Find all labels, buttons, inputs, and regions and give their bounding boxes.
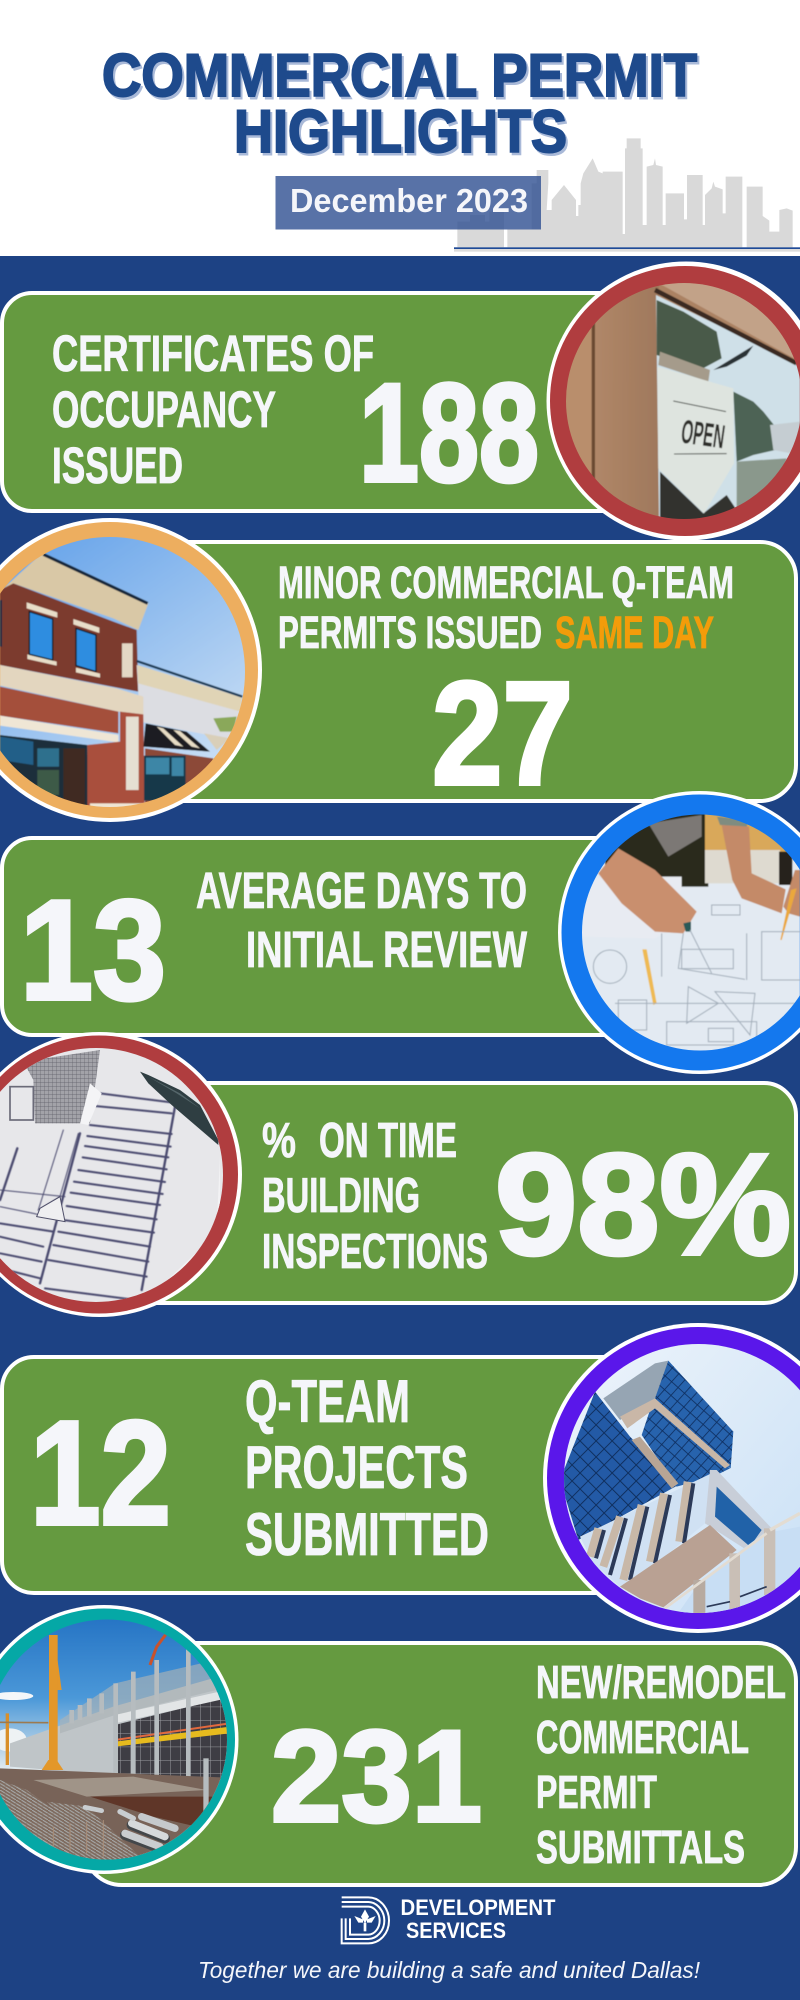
photo circle: open sign bbox=[540, 255, 800, 545]
label: SAME DAY bbox=[555, 607, 714, 658]
number: 12 bbox=[30, 1391, 171, 1556]
green panel bbox=[2, 838, 672, 1035]
title: HIGHLIGHTS bbox=[236, 100, 569, 168]
stat 3: average days to initial review bbox=[2, 790, 800, 1080]
photo circle: glass tower bbox=[540, 1320, 800, 1635]
label bbox=[262, 1114, 488, 1279]
stat 5: q-team projects submitted bbox=[2, 1320, 800, 1635]
label: ON TIME bbox=[319, 1114, 457, 1168]
green panel bbox=[60, 1083, 796, 1303]
label: % bbox=[262, 1114, 296, 1168]
green panel bbox=[84, 1643, 796, 1885]
icon: Dallas D mark bbox=[342, 1897, 389, 1943]
photo circle: open sign: OPEN bbox=[679, 414, 727, 456]
label: AVERAGE DAYS TO bbox=[196, 862, 527, 919]
title: HIGHLIGHTS bbox=[234, 98, 567, 165]
logo wordmark bbox=[400, 1895, 556, 1943]
label bbox=[196, 862, 528, 978]
label bbox=[278, 557, 734, 658]
label: PERMIT bbox=[536, 1766, 657, 1818]
logo wordmark: DEVELOPMENT bbox=[400, 1895, 556, 1920]
label: INITIAL REVIEW bbox=[246, 921, 528, 978]
label: INSPECTIONS bbox=[262, 1225, 488, 1279]
footer logo: development services bbox=[342, 1895, 556, 1943]
label: CERTIFICATES OF bbox=[52, 325, 374, 382]
label bbox=[536, 1656, 786, 1873]
photo circle: hands over blueprint bbox=[555, 790, 800, 1080]
label: Q-TEAM bbox=[245, 1368, 410, 1435]
number: 231 bbox=[271, 1703, 482, 1849]
number: 27 bbox=[432, 652, 573, 816]
title: COMMERCIAL PERMIT bbox=[102, 42, 697, 109]
label: PERMITS ISSUED bbox=[278, 607, 542, 658]
date badge bbox=[276, 176, 541, 230]
stat 4: on time building inspections bbox=[0, 1030, 796, 1320]
label bbox=[52, 325, 374, 494]
label: BUILDING bbox=[262, 1169, 420, 1223]
green panel bbox=[2, 293, 672, 511]
label: OCCUPANCY bbox=[52, 381, 276, 438]
title: COMMERCIAL PERMIT bbox=[104, 44, 699, 112]
tagline: Together we are building a safe and united Dallas! bbox=[198, 1957, 700, 1983]
skyline illustration bbox=[454, 138, 800, 252]
photo circle: storefront bbox=[0, 515, 270, 825]
label: ISSUED bbox=[52, 437, 183, 494]
stat 2: minor commercial q-team same day bbox=[0, 515, 796, 825]
logo wordmark: SERVICES bbox=[406, 1918, 506, 1943]
label: PROJECTS bbox=[245, 1434, 468, 1501]
stat 1: certificates of occupancy bbox=[2, 255, 800, 545]
label: SUBMITTED bbox=[245, 1501, 489, 1568]
stat 6: new/remodel commercial permit submittals bbox=[0, 1600, 796, 1885]
number: 13 bbox=[20, 871, 166, 1030]
label bbox=[245, 1368, 489, 1568]
date badge: December 2023 bbox=[290, 182, 528, 219]
number: 98% bbox=[495, 1124, 791, 1285]
photo circle: construction site bbox=[0, 1600, 245, 1880]
title bbox=[102, 42, 699, 168]
green panel bbox=[2, 1357, 672, 1593]
number: 188 bbox=[359, 354, 539, 511]
green panel bbox=[60, 542, 796, 801]
photo circle: floor plan and pen bbox=[0, 1030, 245, 1320]
